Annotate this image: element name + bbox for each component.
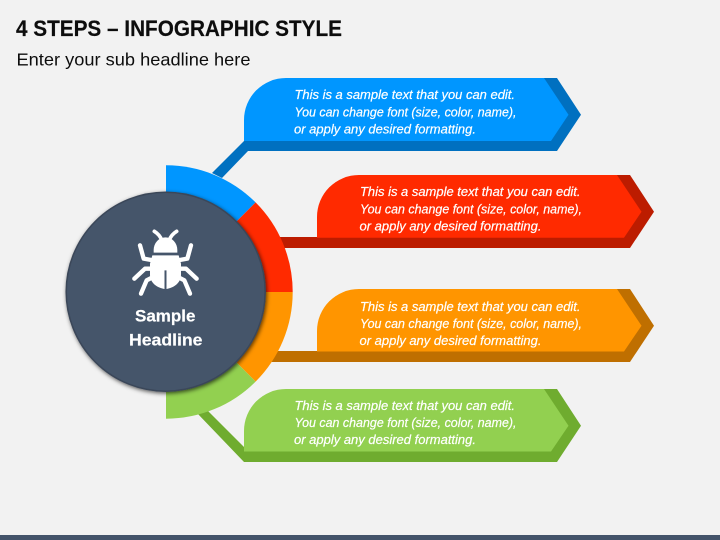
red arrow backing and connector: [270, 175, 654, 248]
panel: green step: [197, 389, 581, 462]
blue arrow body: [244, 78, 568, 141]
ring segment: blue: [166, 165, 256, 292]
icon: bug: [134, 231, 197, 294]
orange step text: This is a sample text that you can edit.: [360, 299, 580, 314]
green step text: You can change font (size, color, name),: [294, 415, 516, 430]
green step text: [294, 398, 516, 447]
panel: blue step: [212, 78, 581, 178]
orange step text: or apply any desired formatting.: [360, 333, 542, 348]
blue step text: or apply any desired formatting.: [294, 122, 476, 136]
central circle: [66, 192, 265, 391]
green step text: or apply any desired formatting.: [294, 432, 476, 447]
sub headline: Enter your sub headline here: [16, 50, 251, 70]
blue step text: You can change font (size, color, name),: [294, 104, 516, 120]
green arrow backing and connector: [197, 389, 581, 462]
panel: red step: [270, 175, 654, 248]
circle label: Headline: [129, 332, 202, 350]
circle label: [129, 308, 202, 350]
orange arrow backing and connector: [265, 289, 654, 362]
red step text: This is a sample text that you can edit.: [360, 184, 580, 199]
panel: orange step: [265, 289, 654, 362]
orange arrow body: [317, 289, 642, 352]
blue step text: [294, 87, 516, 136]
segmented ring: [166, 165, 293, 419]
red arrow body: [317, 175, 642, 238]
ring segment: red: [166, 202, 293, 292]
circle label: Sample: [135, 308, 196, 326]
red step text: [360, 184, 582, 234]
blue arrow backing and connector: [212, 78, 581, 178]
bottom bar: [0, 535, 720, 540]
orange step text: [360, 299, 582, 348]
green arrow body: [244, 389, 568, 452]
red step text: You can change font (size, color, name),: [360, 202, 582, 216]
green step text: This is a sample text that you can edit.: [294, 398, 515, 413]
orange step text: You can change font (size, color, name),: [360, 316, 582, 331]
title: 4 STEPS – INFOGRAPHIC STYLE: [16, 16, 342, 41]
ring segment: orange: [166, 292, 293, 382]
red step text: or apply any desired formatting.: [360, 218, 542, 234]
blue step text: This is a sample text that you can edit.: [294, 87, 515, 102]
ring segment: green: [166, 292, 256, 419]
